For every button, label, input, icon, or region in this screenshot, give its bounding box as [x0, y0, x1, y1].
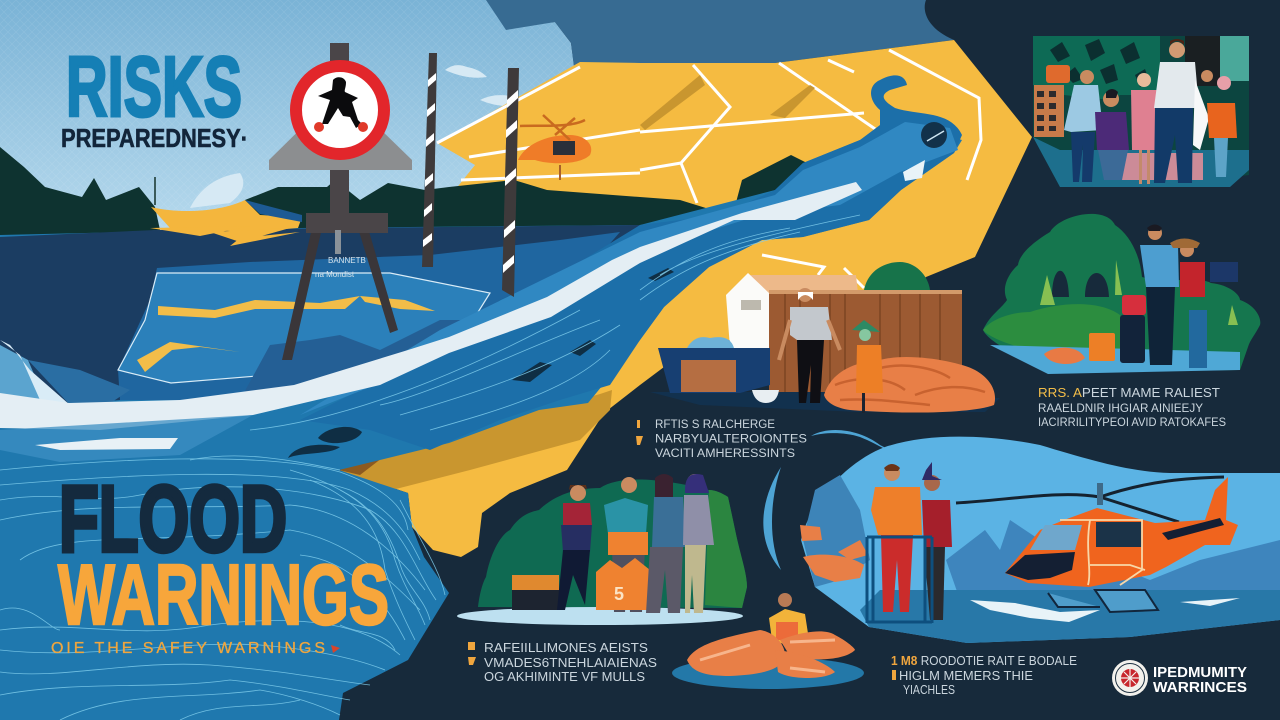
warning sign	[269, 43, 412, 360]
panel: house with sandbags	[650, 262, 1000, 413]
foam band	[0, 182, 862, 430]
text block 2: RAAELDNIR IHGIAR AINIEEJY	[1038, 401, 1203, 415]
dark rocks in water	[288, 268, 674, 458]
water contour lines	[0, 215, 860, 720]
sandbags	[824, 357, 995, 413]
swoosh arcs	[763, 430, 926, 570]
woman in red	[922, 462, 952, 620]
small sign caption: BANNETB	[328, 256, 366, 265]
title: flood: FLOOD	[59, 466, 287, 571]
person on raft	[769, 593, 809, 648]
logo: WARRINCES	[1153, 679, 1247, 696]
clouds	[190, 65, 525, 220]
trees	[478, 480, 747, 608]
rotor	[956, 477, 1224, 522]
tub	[658, 348, 770, 393]
panel: sky	[0, 0, 640, 240]
shaded sand strip	[339, 390, 612, 490]
ground	[457, 607, 743, 625]
upper water: dark basin	[0, 225, 640, 410]
man	[779, 288, 840, 403]
trees: central silhouette	[240, 155, 825, 235]
map outline in water	[0, 273, 490, 410]
water	[860, 590, 1280, 643]
tail band	[1162, 518, 1224, 540]
ground	[1033, 137, 1249, 187]
river base	[990, 345, 1240, 374]
panel: people with supplies	[457, 474, 747, 625]
logo mark	[1112, 660, 1148, 696]
person 1	[1064, 70, 1103, 182]
person 5 child	[1201, 70, 1237, 177]
person grey	[683, 474, 714, 613]
tagline: OIE THE SAFEY WARNINGS	[51, 640, 325, 657]
text block 1: RFTIS S RALCHERGE	[655, 419, 775, 431]
text block 3: RAFEIILLIMONES AEISTS	[484, 641, 648, 655]
panel: family photo	[1033, 36, 1249, 187]
luggage	[1044, 295, 1146, 364]
wooden fence	[769, 290, 962, 392]
tagline arrow	[331, 645, 340, 653]
person jacket	[646, 474, 685, 613]
person 3	[1131, 73, 1158, 184]
small helicopter	[518, 115, 591, 180]
map tile lines	[437, 50, 981, 288]
woman	[557, 485, 592, 610]
text block 2: RRS. APEET MAME RALIEST	[1038, 386, 1220, 400]
person 2	[1095, 89, 1129, 180]
panel: rescue helicopter scene	[800, 437, 1280, 643]
foam strip lower left	[35, 438, 178, 450]
panel: steel blue top region	[486, 0, 954, 75]
text block 3	[468, 641, 657, 684]
striped pole 2	[502, 68, 519, 297]
supply box	[608, 532, 648, 555]
text block 1: NARBYUALTEROIONTES	[655, 434, 807, 446]
text block 4	[891, 654, 1077, 697]
text block 2	[1038, 386, 1226, 429]
panel: flood water, main body	[0, 123, 962, 720]
logo	[1112, 660, 1247, 696]
upper water: mid-blue band	[118, 232, 620, 400]
foliage	[1033, 36, 1160, 100]
title: risks: RISKS	[66, 40, 242, 135]
child	[852, 320, 883, 413]
text block 3: VMADES6TNEHLAIAIENAS	[484, 656, 657, 670]
white house	[726, 273, 769, 348]
text block 4: HIGLM MEMERS THIE	[899, 669, 1033, 683]
foam patch	[0, 415, 253, 462]
skids	[1048, 590, 1158, 612]
grey triangle	[269, 90, 412, 170]
crossbar	[306, 213, 388, 233]
red circle	[296, 66, 384, 154]
box with number	[596, 558, 650, 610]
person teal	[604, 477, 648, 612]
river head and curl	[300, 75, 962, 450]
figure pictogram	[318, 77, 362, 128]
text block 4: 1 M8 ROODOTIE RAIT E BODALE	[891, 654, 1077, 668]
sign legs	[282, 228, 398, 360]
man in orange	[871, 464, 922, 612]
background tree line	[803, 475, 870, 587]
golden boat	[150, 177, 302, 246]
panel: family with luggage	[983, 214, 1260, 374]
woman	[1170, 238, 1238, 368]
blue podium frame	[867, 537, 932, 623]
building	[1034, 85, 1064, 137]
text block 2: IACIRRILITYPEOI AVID RATOKAFES	[1038, 415, 1226, 429]
roof	[748, 275, 858, 293]
sandbags	[687, 630, 855, 678]
sign post	[330, 43, 349, 233]
subtitle: preparedness: PREPAREDNESY·	[61, 123, 248, 153]
logo: IPEDMUMITY	[1153, 664, 1247, 681]
title: warnings: WARNINGS	[58, 548, 389, 643]
panel: yellow map	[339, 40, 1032, 557]
text block 3: OG AKHIMINTE VF MULLS	[484, 670, 645, 684]
text block 1: VACITI AMHERESSINTS	[655, 448, 795, 460]
fuselage	[1005, 477, 1238, 587]
box with number: 5	[614, 584, 624, 604]
trees: left silhouette	[0, 147, 160, 240]
crate	[512, 575, 559, 610]
striped pole 1	[422, 53, 437, 267]
warning sign: na Mondist	[315, 270, 355, 279]
text block 4: YIACHLES	[903, 683, 955, 697]
helicopter	[956, 477, 1238, 612]
sandbags	[800, 525, 868, 582]
person 4 tall man	[1154, 39, 1209, 183]
man	[1140, 224, 1179, 365]
panel: sandbag raft	[672, 593, 864, 689]
trees behind	[864, 262, 930, 290]
text block 1	[636, 419, 807, 460]
ground shadow	[650, 392, 1000, 412]
foam	[970, 598, 1240, 622]
